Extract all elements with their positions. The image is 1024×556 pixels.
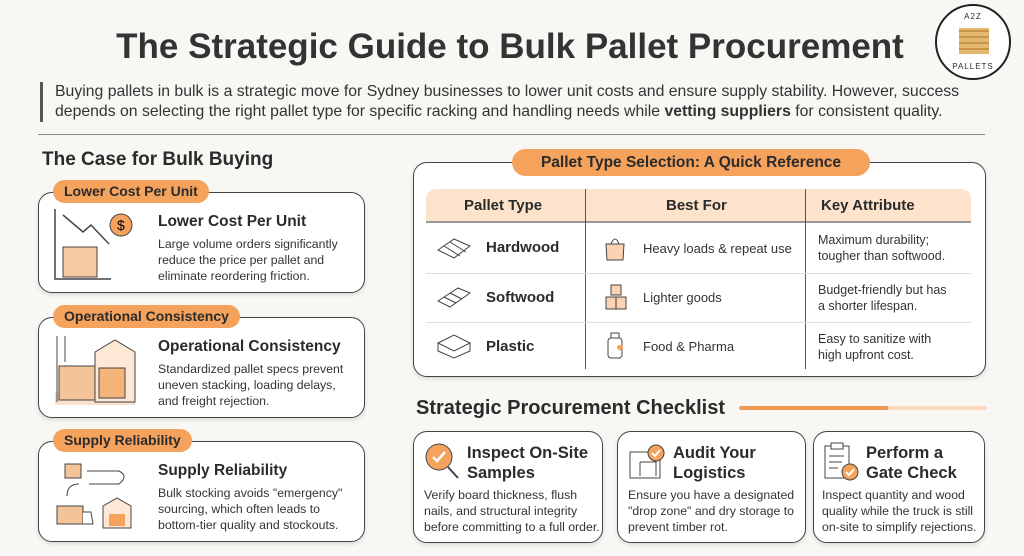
row: softwood: a shorter lifespan. (818, 299, 917, 313)
intro text: Buying pallets in bulk is a strategic move for Sydney businesses to lower unit costs and ensure supply stability. However, success depends on selecting the right pallet type for specific racking and handling needs while vetting suppliers for consistent quality. (55, 83, 959, 120)
pill: supply reliability: Supply Reliability (64, 432, 181, 448)
row: plastic: Food & Pharma (643, 339, 734, 354)
icon: magnifier check (426, 444, 459, 479)
card: gate check: Perform a (866, 444, 943, 462)
pill: table title (512, 149, 870, 176)
row: softwood: Budget-friendly but has (818, 283, 947, 297)
row: softwood (437, 283, 947, 313)
pill: table title: Pallet Type Selection: A Quick Reference (541, 154, 841, 171)
card: operational consistency: Operational Consistency (158, 338, 341, 355)
card: inspect samples: Inspect On-Site (467, 444, 588, 462)
card: supply reliability: sourcing, which often leads to (158, 502, 320, 516)
card: audit logistics (617, 431, 806, 543)
pill: lower cost (53, 180, 209, 203)
icon: floor plan (630, 444, 664, 478)
pill: supply reliability (53, 429, 192, 452)
row: hardwood: tougher than softwood. (818, 249, 945, 263)
card: inspect samples: Samples (467, 464, 535, 482)
card: inspect samples: Verify board thickness, flush nails, and structural integrity before committing to a full order. (424, 488, 600, 534)
card: supply reliability (38, 441, 365, 542)
card: audit logistics: Logistics (673, 464, 745, 482)
icon: clipboard check (824, 442, 858, 480)
row: plastic (437, 332, 931, 362)
card: operational consistency: uneven stacking, loading delays, (158, 378, 336, 392)
card: supply reliability: Supply Reliability (158, 462, 287, 479)
card: operational consistency: and freight rejection. (158, 394, 269, 408)
row: hardwood: Heavy loads & repeat use (643, 241, 792, 256)
card: audit logistics: Audit Your (673, 444, 756, 462)
card: operational consistency (38, 317, 365, 418)
row: hardwood: Maximum durability; (818, 233, 929, 247)
card: supply reliability: bottom-tier quality and stockouts. (158, 518, 338, 532)
card: gate check: Gate Check (866, 464, 957, 482)
table header (426, 189, 971, 223)
pill: operational consistency (53, 305, 240, 328)
row: plastic: high upfront cost. (818, 348, 914, 362)
card: lower cost: Large volume orders significantly (158, 237, 338, 251)
card: inspect samples (413, 431, 603, 543)
pill: lower cost: Lower Cost Per Unit (64, 183, 198, 199)
card: audit logistics: Ensure you have a designated "drop zone" and dry storage to prevent timber rot. (628, 488, 794, 534)
card: lower cost: reduce the price per pallet and (158, 253, 324, 267)
heading: checklist: Strategic Procurement Checklist (416, 397, 725, 419)
pill: operational consistency: Operational Consistency (64, 308, 229, 324)
row: plastic: Easy to sanitize with (818, 332, 931, 346)
logo (935, 4, 1011, 80)
card: lower cost: eliminate reordering friction. (158, 269, 310, 283)
row: softwood: Softwood (486, 289, 554, 306)
card: gate check (813, 431, 985, 543)
table header: Best For (666, 197, 727, 214)
icon: supply loop (56, 464, 132, 528)
panel: pallet type table (413, 162, 986, 377)
icon: stacked pallets (55, 336, 136, 405)
card: gate check: Inspect quantity and wood quality while the truck is still on-site to simplify rejections. (822, 488, 976, 534)
row: softwood: Lighter goods (643, 290, 722, 305)
row: hardwood: Hardwood (486, 239, 559, 256)
icon: price chart (54, 209, 132, 280)
table header: Pallet Type (464, 197, 542, 214)
card: lower cost (38, 192, 365, 293)
heading: case for bulk buying: The Case for Bulk Buying (42, 149, 273, 170)
logo: A2Z (964, 12, 982, 21)
row: plastic: Plastic (486, 338, 534, 355)
logo: PALLETS (952, 62, 994, 71)
title: The Strategic Guide to Bulk Pallet Procurement (116, 27, 904, 66)
row: hardwood (437, 233, 945, 263)
table header: Key Attribute (821, 197, 915, 214)
card: operational consistency: Standardized pallet specs prevent (158, 362, 343, 376)
card: supply reliability: Bulk stocking avoids "emergency" (158, 486, 342, 500)
card: lower cost: Lower Cost Per Unit (158, 213, 306, 230)
icon: price chart: $ (117, 217, 125, 233)
